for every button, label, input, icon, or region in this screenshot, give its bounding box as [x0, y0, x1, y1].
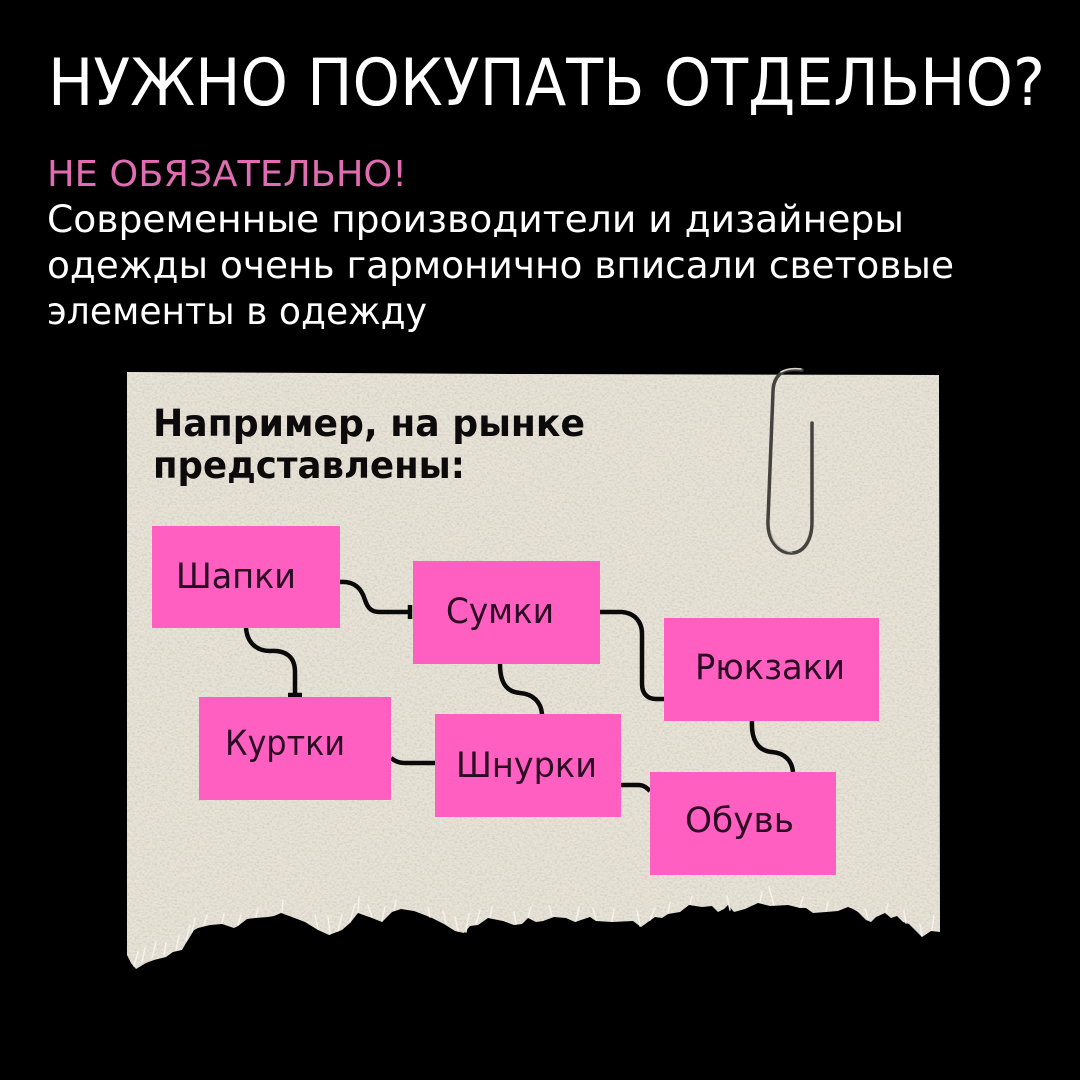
box: Сумки: Сумки — [446, 592, 554, 632]
intro line 3: элементы в одежду — [47, 290, 427, 333]
box: Обувь — [650, 772, 836, 875]
pink subheading: НЕ ОБЯЗАТЕЛЬНО! — [47, 154, 407, 195]
heading line 2: представлены: — [153, 444, 465, 487]
connector: Куртки to Шнурки — [391, 758, 435, 763]
box: Шапки: Шапки — [176, 557, 296, 597]
intro text block — [47, 154, 954, 333]
panel: torn paper note — [120, 365, 950, 975]
connector: Рюкзаки to Обувь — [752, 721, 793, 772]
panel heading — [153, 402, 585, 487]
box: Рюкзаки — [664, 618, 879, 721]
connector: Шнурки to Обувь — [621, 785, 650, 791]
intro line 2: одежды очень гармонично вписали световые — [47, 244, 954, 287]
connectors — [246, 582, 793, 791]
box: Рюкзаки: Рюкзаки — [695, 648, 845, 688]
box: Обувь: Обувь — [685, 801, 794, 841]
box: Сумки — [413, 561, 600, 664]
connector: Сумки to Рюкзаки — [600, 612, 664, 699]
icon: paperclip — [768, 369, 812, 553]
paper sheet — [120, 365, 950, 975]
infographic canvas — [48, 56, 1041, 969]
connector: Шапки to Сумки — [340, 582, 410, 619]
box: Куртки: Куртки — [225, 724, 345, 764]
box: Шапки — [152, 526, 340, 628]
torn edge fibres — [134, 887, 934, 966]
box: Куртки — [199, 697, 391, 800]
heading line 1: Например, на рынке — [153, 402, 585, 445]
box: Шнурки — [435, 714, 621, 817]
connector: Сумки to Шнурки — [500, 664, 542, 714]
box: Шнурки: Шнурки — [456, 746, 597, 786]
intro line 1: Современные производители и дизайнеры — [47, 198, 904, 241]
connector: Шапки to Куртки — [246, 628, 302, 695]
